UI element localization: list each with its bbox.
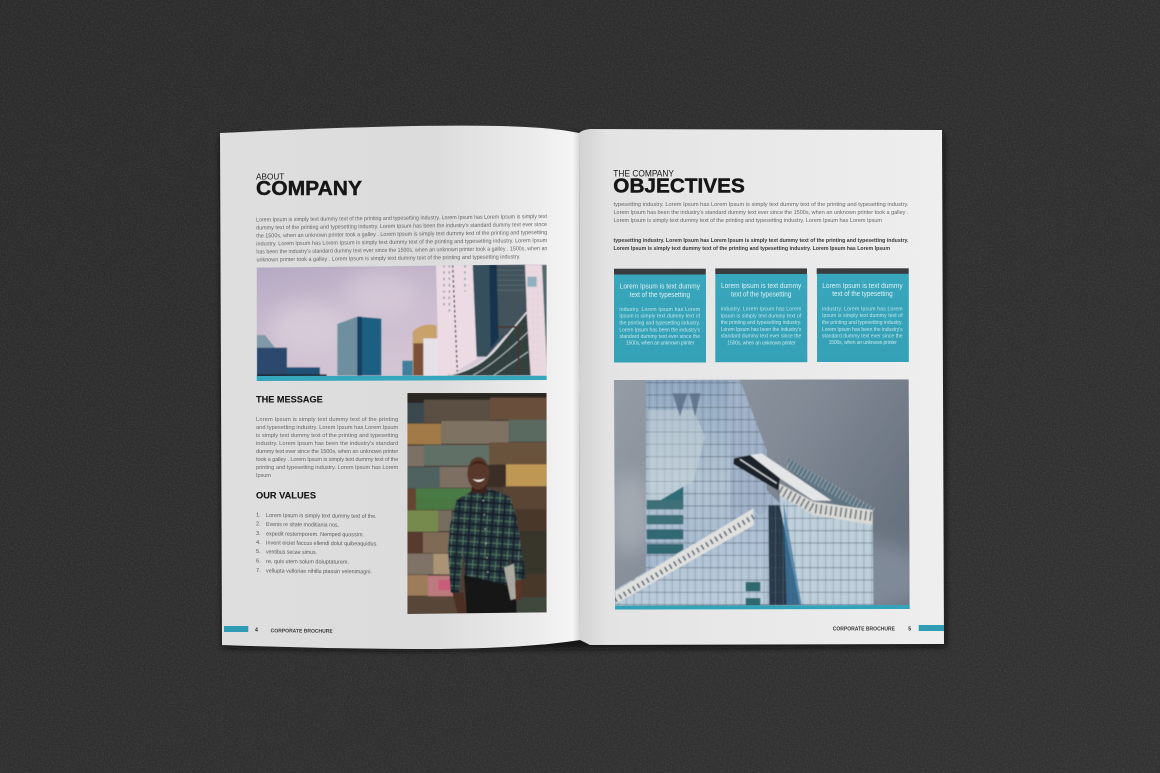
numbered list: values: 3. (256, 531, 261, 537)
card: objective 1 (614, 269, 706, 362)
card text: 1500s, when an unknown printer (829, 340, 897, 346)
card text (822, 306, 903, 346)
card body (817, 274, 909, 362)
photo: glass skyscraper (614, 380, 910, 606)
text block: message body: industry. Lorem Ipsum has been the industry's standard (256, 441, 398, 447)
card title: Lorem Ipsum is text dummy (822, 283, 903, 290)
brochure shadow (220, 134, 946, 651)
card text: the printing and typesetting industry. (619, 320, 700, 326)
photo: city skyline (255, 262, 550, 378)
numbered list: values: 2. (256, 522, 261, 528)
card title: text of the typesetting (630, 292, 690, 299)
card text: Ipsum is simply text dummy text of (822, 313, 903, 319)
man: folder (504, 564, 517, 600)
footer: right page (833, 625, 944, 632)
text block: message body: dummy text ever since the 1500s, when an unknown printer (256, 449, 398, 455)
teal footer tab (224, 626, 248, 632)
text block: company intro: the 1500s, when an unknown printer took a galley . Lorem Ipsum is simply text dummy text of the printing and typesetting (256, 230, 547, 239)
man: hands (453, 592, 467, 613)
text block: bold statement (614, 238, 909, 252)
numbered list: values: Evenis re sitate moditiania nos. (266, 522, 339, 529)
left page sheet (220, 126, 580, 649)
brochure name: CORPORATE BROCHURE (271, 628, 333, 635)
man: trousers (464, 575, 517, 615)
card title (822, 283, 903, 298)
text block: message body: and typesetting industry. Lorem Ipsum has Lorem Ipsum (256, 425, 399, 431)
card text: the printing and typesetting industry. (721, 320, 801, 326)
card body (614, 274, 706, 362)
numbered list: values: ventibus secae simus. (266, 550, 317, 556)
text block: objectives intro: typesetting industry. Lorem Ipsum has Lorem Ipsum is simply text dummy text of the printing and typesetting industry. (614, 202, 909, 208)
text block: company intro: has been the industry's standard dummy text ever since the 1500s, when an unknown printer took a galley . 1500s, when an (256, 246, 547, 255)
numbered list: values: expedit restemporem. Nemped quossim. (266, 532, 364, 538)
card text: standard dummy text ever since the (721, 334, 802, 340)
card text: the printing and typesetting industry. (822, 320, 903, 326)
footer: left page (224, 626, 333, 635)
heading: our values: OUR VALUES (256, 491, 317, 502)
right page sheet (579, 129, 944, 645)
card text: Ipsum is simply text dummy text of (619, 314, 701, 320)
text block: objectives intro (614, 202, 909, 224)
card text: standard dummy text ever since the (822, 334, 903, 340)
text block: company intro (256, 214, 548, 263)
text block: company intro: Lorem Ipsum is simply text dummy text of the printing and typesetting industry. Lorem Ipsum has Lorem Ipsum is simply text (256, 214, 547, 223)
card text (619, 307, 701, 347)
card title: text of the typesetting (731, 292, 791, 298)
heading: the company objectives: THE COMPANY (613, 168, 674, 178)
card text: 1500s, when an unknown printer (727, 340, 796, 346)
card text: Lorem Ipsum has been the industry's (721, 327, 802, 333)
card title (721, 283, 802, 298)
numbered list: values: 6. (256, 558, 261, 564)
text block: company intro: dummy text of the printing and typesetting industry. Lorem Ipsum has been the industry's standard dummy text ever since (256, 222, 547, 231)
card text: industry. Lorem Ipsum has Lorem (619, 307, 700, 313)
card text: standard dummy text ever since the (619, 334, 700, 340)
teal footer tab (919, 625, 944, 631)
text block: message body: is simply text dummy text of the printing and typesetting (256, 433, 398, 439)
heading: about company: COMPANY (256, 177, 362, 200)
text block: message body: Lorem Ipsum is simply text dummy text of the printing (256, 417, 398, 423)
text block: message body: printing and typesetting industry. Lorem Ipsum has Lorem (256, 465, 399, 471)
photo: smiling man against wood wall (407, 392, 548, 615)
card text: 1500s, when an unknown printer (626, 341, 695, 347)
card text: Lorem Ipsum has been the industry's (619, 327, 700, 333)
panel: left page (220, 126, 580, 649)
card body (715, 274, 807, 362)
text block: objectives intro: Lorem Ipsum is simply text dummy text of the printing and typesetting industry. Lorem Ipsum has Lorem Ipsum (614, 218, 882, 224)
numbered list: values: 4. (256, 540, 261, 546)
card header bar (614, 269, 706, 275)
text block: message body: took a galley . Lorem Ipsum is simply text dummy text of the (256, 457, 398, 463)
card title (620, 284, 700, 299)
text block: bold statement: Lorem Ipsum is simply text dummy text of the printing and typesetting industry. Lorem Ipsum has Lorem Ipsum (614, 246, 890, 252)
card: objective 2 (715, 268, 807, 362)
card header bar (715, 268, 807, 274)
text block: message body (256, 417, 399, 479)
panel: right page (579, 129, 944, 645)
text block: company intro: industry. Lorem Ipsum has Lorem Ipsum is simply text dummy text of the printing and typesetting industry. Lorem Ipsum (256, 238, 548, 247)
card text: industry. Lorem Ipsum has Lorem (721, 307, 801, 313)
text block: bold statement: typesetting industry. Lorem Ipsum has Lorem Ipsum is simply text dummy text of the printing and typesetting industry. (614, 238, 909, 244)
card title: Lorem Ipsum is text dummy (620, 284, 700, 290)
teal strip under skyline photo (257, 376, 547, 381)
man: head (467, 457, 489, 493)
card text: industry. Lorem Ipsum has Lorem (822, 306, 903, 312)
card title: Lorem Ipsum is text dummy (721, 283, 802, 290)
page number 4: 4 (255, 628, 258, 634)
man: plaid shirt (448, 489, 526, 595)
numbered list: values: re, quis utem solum doluptaturem. (266, 559, 349, 566)
text block: message body: Ipsum (256, 473, 271, 479)
card: objective 3 (817, 268, 909, 362)
text block: objectives intro: Lorem Ipsum has been the industry's standard dummy text ever since the 1500s, when an unknown printer took a galley . (614, 210, 909, 216)
numbered list: values (256, 512, 378, 575)
heading: about company: ABOUT (256, 172, 285, 182)
heading: the message: THE MESSAGE (256, 395, 323, 406)
heading: the company objectives: OBJECTIVES (613, 175, 745, 197)
numbered list: values: 5. (256, 549, 261, 555)
card text: Ipsum is simply text dummy text of (721, 313, 802, 319)
card text (721, 307, 802, 346)
numbered list: values: 1. (256, 512, 261, 518)
card header bar (817, 268, 909, 274)
card text: Lorem Ipsum has been the industry's (822, 327, 903, 333)
numbered list: values: Lorem Ipsum is simply text dummy text of the. (266, 513, 377, 520)
numbered list: values: vellupta velloriae nihillu ptassin velenimagni. (266, 569, 372, 575)
card title: text of the typesetting (832, 291, 893, 298)
teal strip under skyscraper photo (615, 605, 910, 610)
numbered list: values: Invent eiciet faccus ellendi dolut quibeaquidus. (266, 541, 378, 547)
page number 5: 5 (908, 626, 911, 632)
numbered list: values: 7. (256, 568, 261, 574)
text block: company intro: unknown printer took a galley . Lorem Ipsum is simply text dummy text of the printing and typesetting industry. (256, 254, 521, 263)
brochure name: CORPORATE BROCHURE (833, 626, 896, 632)
open brochure (220, 126, 944, 649)
